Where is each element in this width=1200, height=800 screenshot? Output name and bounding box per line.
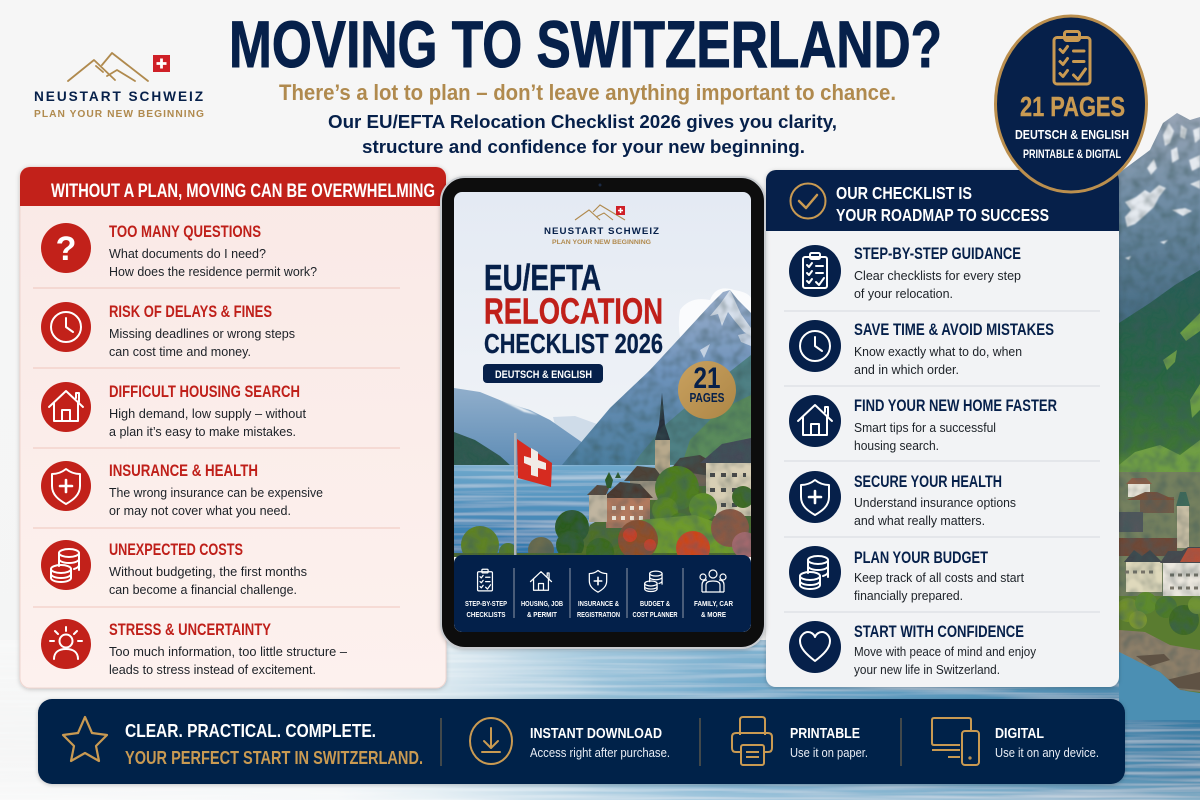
- icon: mountains: [68, 53, 148, 81]
- intro text: Our EU/EFTA Relocation Checklist 2026 gives you clarity,: [328, 111, 837, 132]
- item: too many questions: TOO MANY QUESTIONS: [109, 223, 261, 241]
- icon: gold clipboard: [1054, 32, 1090, 84]
- item: stress and uncertainty: Too much information, too little structure –: [109, 645, 347, 659]
- logo: Neustart Schweiz: [34, 53, 205, 120]
- cover feature bar: HOUSING, JOB: [521, 599, 563, 608]
- item: insurance and health: The wrong insurance can be expensive: [109, 486, 323, 500]
- badge: 21 pages: [996, 16, 1146, 192]
- item: insurance and health: INSURANCE & HEALTH: [109, 462, 258, 480]
- feature: printable: PRINTABLE: [790, 726, 860, 742]
- language pill: DEUTSCH & ENGLISH: [495, 369, 592, 381]
- item: secure your health: SECURE YOUR HEALTH: [854, 473, 1002, 491]
- item: risk of delays and fines: Missing deadlines or wrong steps: [109, 327, 295, 341]
- tablet mockup: [441, 177, 765, 648]
- panel heading: OUR CHECKLIST IS: [836, 183, 972, 203]
- item: find your new home faster: Smart tips for a successful: [854, 421, 996, 435]
- icon: star: [63, 717, 107, 761]
- cover feature bar: CHECKLISTS: [466, 610, 506, 619]
- title: MOVING TO SWITZERLAND?: [229, 7, 942, 81]
- item: secure your health: [789, 471, 1016, 528]
- panel heading: WITHOUT A PLAN, MOVING CAN BE OVERWHELMING: [51, 181, 435, 202]
- cover 21 pages seal: PAGES: [690, 390, 725, 405]
- cover 21 pages seal: [678, 361, 736, 419]
- cover title: EU/EFTA: [484, 257, 601, 298]
- item: step-by-step guidance: of your relocation.: [854, 287, 953, 301]
- item: plan your budget: [789, 546, 1025, 603]
- cover logo: [544, 205, 660, 246]
- bottom bar: [38, 699, 1125, 784]
- item: find your new home faster: housing search.: [854, 439, 939, 453]
- trees and flowers: [454, 466, 751, 558]
- item: stress and uncertainty: [41, 619, 347, 677]
- slogan: CLEAR. PRACTICAL. COMPLETE.: [125, 720, 376, 741]
- item: risk of delays and fines: can cost time and money.: [109, 345, 251, 359]
- feature: printable: Use it on paper.: [790, 746, 868, 760]
- item: start with confidence: Move with peace of mind and enjoy: [854, 645, 1037, 659]
- intro text: [328, 111, 837, 157]
- item: too many questions: ?: [56, 230, 76, 268]
- cover feature bar: INSURANCE &: [578, 599, 619, 608]
- village: [575, 393, 751, 557]
- item: save time and avoid mistakes: and in which order.: [854, 363, 959, 377]
- item: unexpected costs: Without budgeting, the first months: [109, 565, 307, 579]
- cover feature bar: [454, 555, 751, 632]
- language pill: [483, 364, 603, 383]
- item: save time and avoid mistakes: Know exactly what to do, when: [854, 345, 1022, 359]
- item: too many questions: [41, 223, 317, 279]
- Swiss flag on pole: [514, 433, 552, 557]
- item: difficult housing search: [41, 382, 307, 439]
- tablet screen: cover: [454, 192, 758, 632]
- item: difficult housing search: High demand, low supply – without: [109, 407, 307, 421]
- item: plan your budget: Keep track of all costs and start: [854, 571, 1025, 585]
- slogan: YOUR PERFECT START IN SWITZERLAND.: [125, 747, 423, 768]
- item: difficult housing search: a plan it’s easy to make mistakes.: [109, 425, 296, 439]
- icon: Swiss flag: [153, 55, 170, 72]
- item: save time and avoid mistakes: [789, 320, 1054, 377]
- cover title: [484, 263, 662, 354]
- badge formats: PRINTABLE & DIGITAL: [1023, 149, 1121, 161]
- panel heading: [766, 170, 1119, 231]
- feature: digital: [932, 718, 1099, 765]
- item: secure your health: Understand insurance options: [854, 496, 1016, 510]
- item: start with confidence: [789, 621, 1037, 677]
- item: too many questions: How does the residence permit work?: [109, 265, 317, 279]
- item: difficult housing search: DIFFICULT HOUSING SEARCH: [109, 383, 300, 401]
- cover landscape: [454, 288, 758, 566]
- item: step-by-step guidance: Clear checklists for every step: [854, 269, 1021, 283]
- item: stress and uncertainty: STRESS & UNCERTAINTY: [109, 621, 271, 639]
- item: unexpected costs: [41, 540, 307, 597]
- slogan: [125, 720, 423, 768]
- item: plan your budget: PLAN YOUR BUDGET: [854, 549, 988, 567]
- cover feature bar: STEP-BY-STEP: [465, 599, 507, 608]
- panel: roadmap to success: [766, 170, 1119, 687]
- item: step-by-step guidance: [789, 245, 1021, 301]
- item: unexpected costs: UNEXPECTED COSTS: [109, 541, 243, 559]
- cover 21 pages seal: 21: [694, 362, 720, 395]
- cover logo: PLAN YOUR NEW BEGINNING: [552, 240, 651, 246]
- cover feature bar: REGISTRATION: [577, 610, 620, 619]
- tagline: PLAN YOUR NEW BEGINNING: [34, 109, 205, 120]
- item: too many questions: What documents do I need?: [109, 247, 266, 261]
- feature: instant download: Access right after purchase.: [530, 746, 670, 760]
- feature: printable: [732, 717, 868, 765]
- cover feature bar: BUDGET &: [640, 599, 670, 608]
- item: insurance and health: [41, 461, 323, 518]
- badge number: 21 PAGES: [1020, 91, 1125, 122]
- badge languages: DEUTSCH & ENGLISH: [1015, 127, 1129, 142]
- subtitle: There’s a lot to plan – don’t leave anything important to chance.: [279, 80, 896, 105]
- item: start with confidence: your new life in Switzerland.: [854, 663, 1000, 677]
- item: save time and avoid mistakes: SAVE TIME & AVOID MISTAKES: [854, 321, 1054, 339]
- item: plan your budget: financially prepared.: [854, 589, 963, 603]
- intro text: structure and confidence for your new beginning.: [362, 136, 805, 157]
- brand name: NEUSTART SCHWEIZ: [34, 88, 205, 104]
- item: unexpected costs: can become a financial challenge.: [109, 583, 297, 597]
- cover feature bar: FAMILY, CAR: [694, 599, 733, 608]
- cover feature bar: COST PLANNER: [632, 610, 678, 619]
- item: risk of delays and fines: RISK OF DELAYS & FINES: [109, 303, 272, 321]
- item: start with confidence: START WITH CONFIDENCE: [854, 623, 1024, 641]
- item: step-by-step guidance: STEP-BY-STEP GUIDANCE: [854, 245, 1021, 263]
- panel heading: YOUR ROADMAP TO SUCCESS: [836, 205, 1049, 225]
- panel: without a plan: [20, 167, 446, 688]
- item: insurance and health: or may not cover what you need.: [109, 504, 291, 518]
- feature: digital: Use it on any device.: [995, 746, 1099, 760]
- panel heading: [20, 167, 446, 206]
- item: stress and uncertainty: leads to stress instead of excitement.: [109, 663, 316, 677]
- item: secure your health: and what really matters.: [854, 514, 985, 528]
- cover title: RELOCATION: [484, 290, 663, 332]
- cover logo: NEUSTART SCHWEIZ: [544, 226, 660, 237]
- feature: instant download: [470, 718, 670, 764]
- cover feature bar: & MORE: [701, 610, 726, 619]
- item: find your new home faster: [789, 395, 1057, 453]
- item: find your new home faster: FIND YOUR NEW HOME FASTER: [854, 397, 1057, 415]
- feature: digital: DIGITAL: [995, 726, 1044, 742]
- cover feature bar: & PERMIT: [527, 610, 557, 619]
- item: risk of delays and fines: [41, 302, 295, 359]
- feature: instant download: INSTANT DOWNLOAD: [530, 726, 662, 742]
- cover title: CHECKLIST 2026: [484, 328, 663, 359]
